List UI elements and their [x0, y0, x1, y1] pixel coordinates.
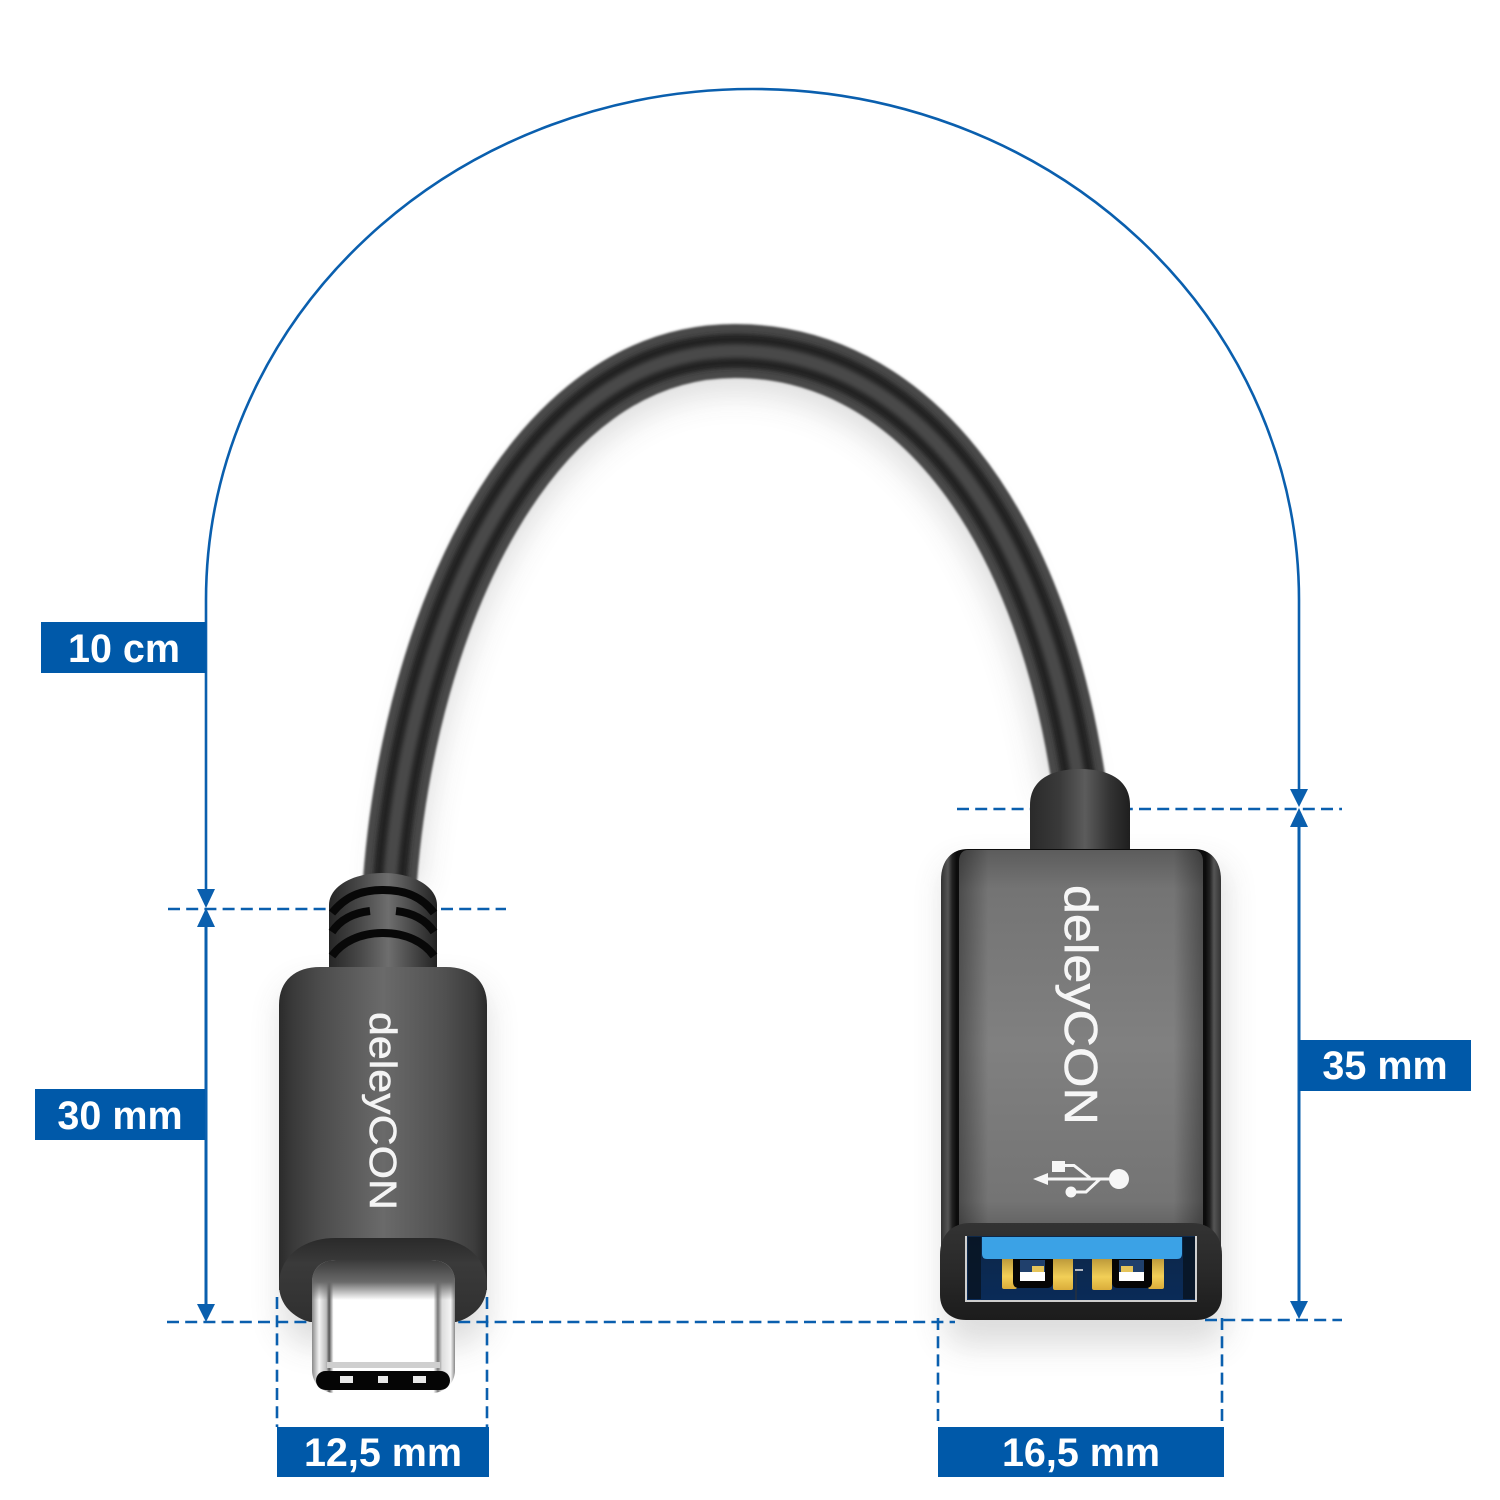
- brand: deleyCON: deleyCON: [361, 1012, 403, 1210]
- USB-C connector: [279, 873, 487, 1393]
- metal housing: [279, 967, 487, 1290]
- metal housing side edges: [941, 849, 1221, 1260]
- blue tongue: [982, 1237, 1182, 1259]
- dimension line: total length arc: [206, 89, 1299, 892]
- label: 12,5 mm: 12,5 mm: [304, 1431, 462, 1475]
- label: 10 cm: [41, 622, 206, 673]
- strain relief: [329, 873, 437, 970]
- dashed guide lines: [167, 809, 1342, 1427]
- housing top panel: [959, 850, 1203, 1240]
- connector front face: [279, 1238, 487, 1322]
- label: 10 cm: 10 cm: [68, 627, 180, 671]
- label: 16,5 mm: 16,5 mm: [1002, 1431, 1160, 1475]
- USB-A female connector: [940, 769, 1222, 1320]
- spring contacts: [1013, 1257, 1152, 1288]
- connector front face: [940, 1223, 1222, 1320]
- plug opening with pads: [316, 1371, 450, 1390]
- label: 35 mm: [1299, 1040, 1471, 1091]
- label: 16,5 mm: [938, 1427, 1224, 1477]
- port opening: [966, 1236, 1196, 1301]
- gold contacts: [1002, 1257, 1164, 1290]
- neck: [1030, 769, 1130, 860]
- label: 30 mm: [35, 1089, 205, 1140]
- arrowheads: [197, 789, 1308, 1322]
- cable: [390, 351, 1080, 880]
- brand: deleyCON: deleyCON: [1055, 885, 1107, 1125]
- icon: USB trident: [1033, 1161, 1129, 1198]
- dimension lines: connector heights: [206, 825, 1299, 1306]
- soft shadows under the product: [282, 372, 1225, 1345]
- chrome plug: [312, 1260, 455, 1393]
- label: 35 mm: 35 mm: [1322, 1044, 1448, 1088]
- label: 12,5 mm: [277, 1427, 489, 1477]
- label: 30 mm: 30 mm: [57, 1094, 183, 1138]
